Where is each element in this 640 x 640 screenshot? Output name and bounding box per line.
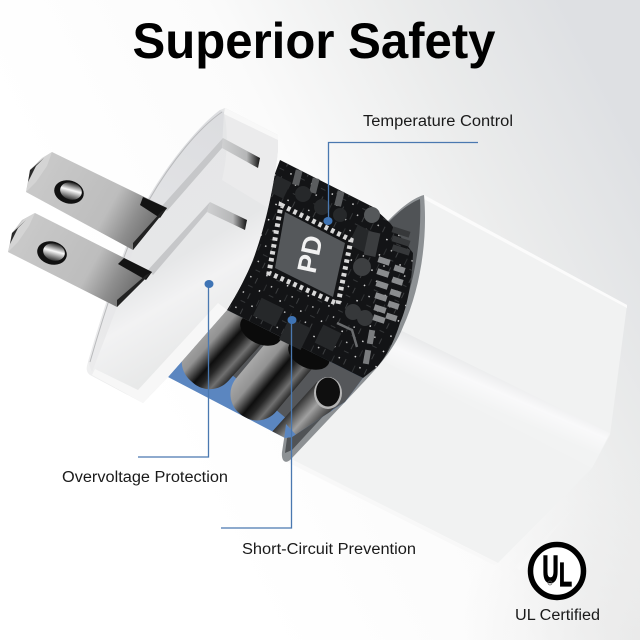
- circuit board: [227, 160, 413, 378]
- chip pins: [269, 205, 351, 304]
- prong: upper: [26, 152, 167, 250]
- small components: [253, 175, 376, 351]
- icon: UL certification mark: [530, 544, 584, 598]
- top right connectors: [392, 226, 410, 256]
- title: Superior Safety: [132, 13, 496, 69]
- prong: lower: [8, 213, 152, 307]
- PD chip: PD: [292, 233, 329, 276]
- slot lower: [207, 202, 247, 230]
- icon: UL certification mark: L: [559, 556, 572, 593]
- callout: overvoltage protection: Overvoltage Protection: [62, 469, 228, 486]
- callout: overvoltage protection: [62, 280, 228, 486]
- UL certified label: UL Certified: [515, 607, 600, 624]
- charger body: [283, 195, 627, 565]
- icon: UL certification mark: U: [542, 549, 558, 591]
- callout: temperature control: Temperature Control: [363, 113, 513, 130]
- round capacitors and parts: [337, 207, 380, 364]
- top connectors: [292, 169, 345, 207]
- callout: short-circuit prevention: Short-Circuit Prevention: [242, 541, 416, 558]
- callout: short-circuit prevention: [221, 316, 416, 558]
- callout: temperature control: [324, 113, 513, 225]
- plug front plate: [87, 108, 278, 403]
- cut-away shell: [282, 195, 425, 462]
- capacitors: [168, 310, 363, 438]
- slot upper: [222, 138, 260, 168]
- PD chip: [275, 212, 345, 297]
- resistor columns: [372, 256, 406, 324]
